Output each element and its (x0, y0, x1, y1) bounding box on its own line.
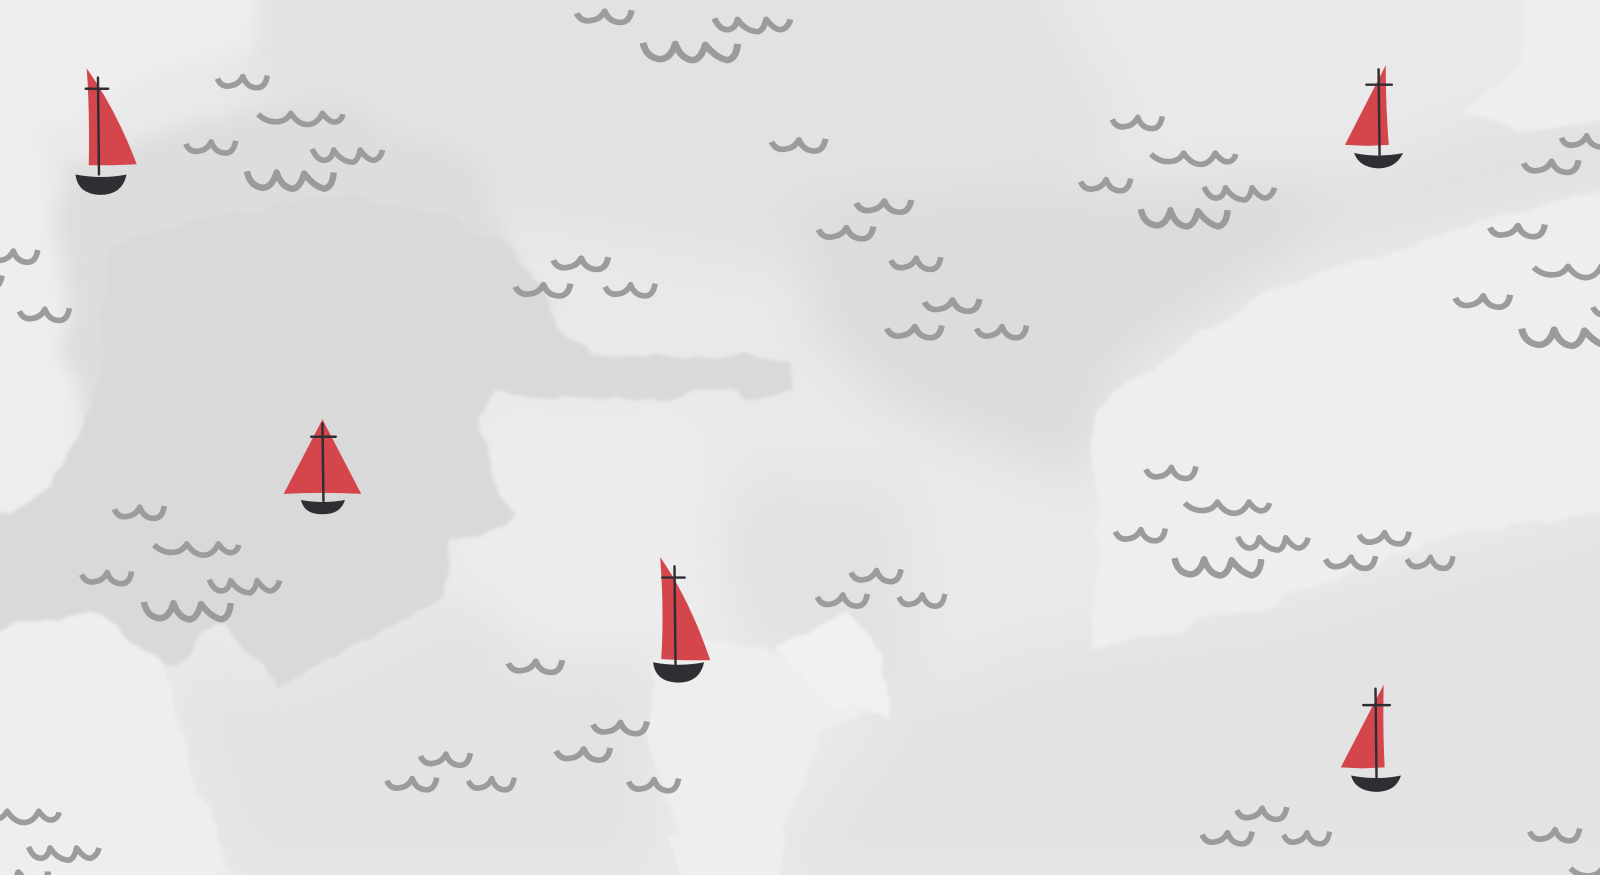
wave cluster: top left (186, 76, 383, 189)
wave cluster: far right (1455, 135, 1600, 346)
wave cluster: right of center lower (1326, 532, 1453, 568)
wave cluster: left edge (0, 250, 69, 320)
sailboat: top left (76, 68, 137, 195)
sailboat: center (653, 557, 710, 683)
wave cluster: lower left (82, 506, 280, 619)
wave cluster: bottom center (556, 721, 679, 791)
wave: single near center boat (508, 660, 562, 672)
sailboat: center left (284, 419, 361, 514)
wave cluster: bottom center left (387, 753, 514, 790)
wave cluster: below center (817, 569, 945, 606)
wave cluster: bottom left (0, 811, 99, 875)
wave cluster: upper right (1081, 116, 1274, 227)
wave cluster: bottom right center (1202, 807, 1330, 844)
wave cluster: center right upper (818, 200, 941, 269)
wave cluster: lower right (1115, 466, 1308, 576)
wave cluster: bottom right (1530, 829, 1600, 875)
sailboat: bottom right (1341, 685, 1401, 792)
wave cluster: upper center (515, 257, 655, 296)
wave: single at top center (772, 139, 826, 151)
sailboat: top right (1345, 65, 1403, 168)
wave cluster: center right lower (887, 299, 1027, 338)
wave cluster: top center (577, 10, 790, 60)
